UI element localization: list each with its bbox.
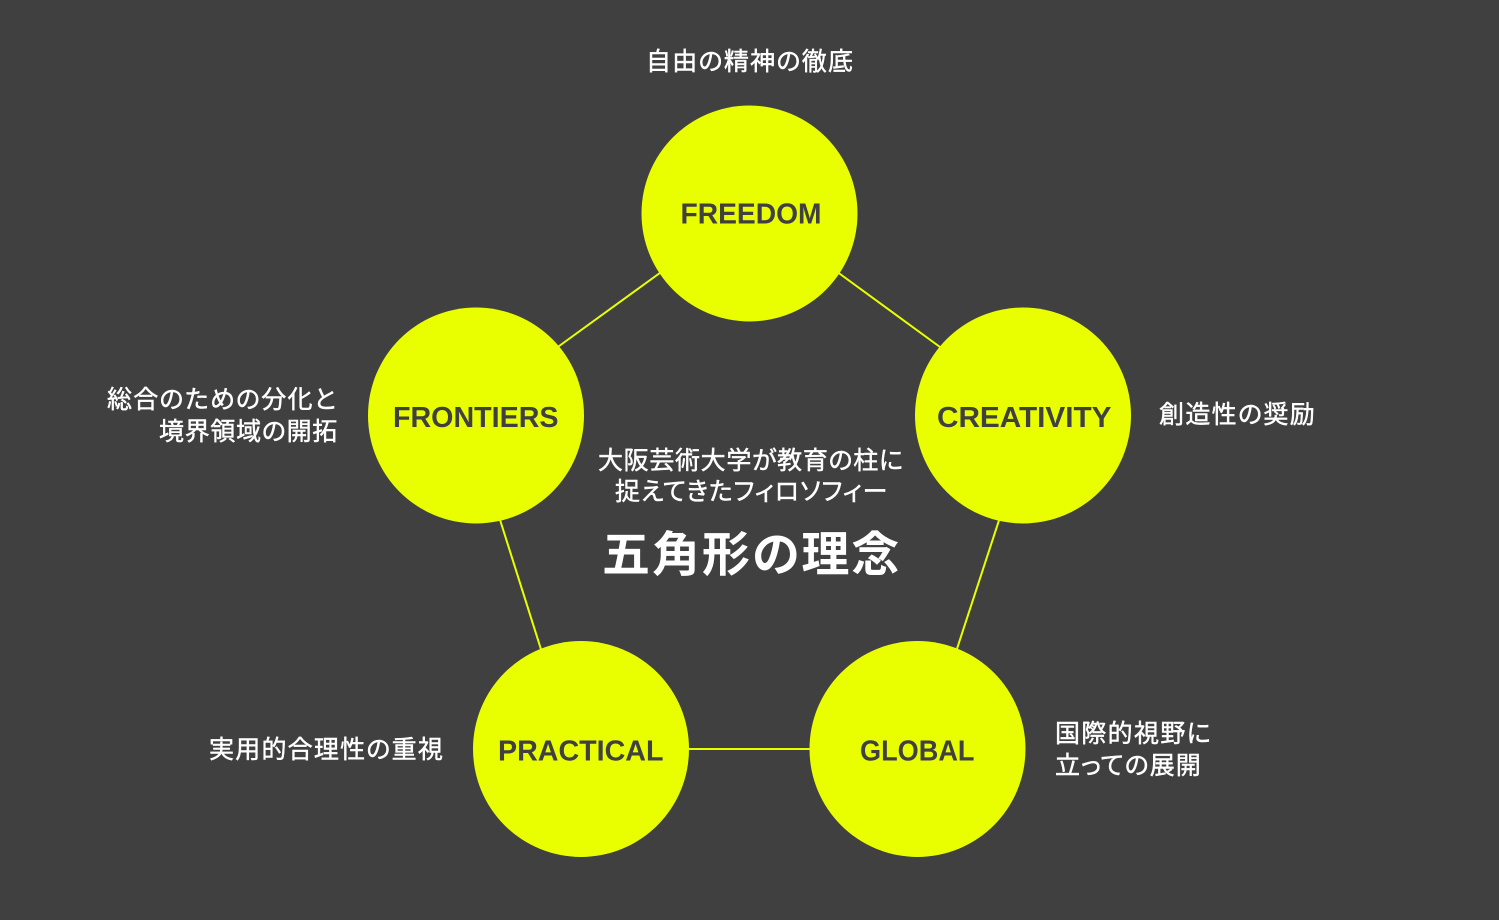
label: frontiers: 境界領域の開拓	[159, 412, 338, 448]
label: frontiers	[107, 380, 338, 448]
circle: FRONTIERS	[368, 308, 584, 524]
circle: CREATIVITY	[915, 308, 1131, 524]
circle: FREEDOM: FREEDOM	[680, 198, 822, 230]
circle: GLOBAL	[810, 641, 1026, 857]
center subheading	[598, 441, 904, 508]
circle: PRACTICAL	[473, 641, 689, 857]
label: freedom: 自由の精神の徹底	[646, 42, 854, 78]
center subheading: 大阪芸術大学が教育の柱に	[598, 441, 904, 477]
circle: PRACTICAL: PRACTICAL	[498, 736, 664, 768]
center title: 五角形の理念	[602, 515, 901, 585]
label: global: 立っての展開	[1055, 746, 1202, 782]
circle: FRONTIERS: FRONTIERS	[393, 402, 558, 434]
label: frontiers: 総合のための分化と	[107, 380, 337, 416]
circle: CREATIVITY: CREATIVITY	[937, 402, 1112, 434]
label: global: 国際的視野に	[1055, 714, 1212, 750]
circle: GLOBAL: GLOBAL	[860, 736, 974, 768]
label: global	[1055, 714, 1212, 782]
label: practical: 実用的合理性の重視	[209, 730, 444, 766]
label: creativity: 創造性の奨励	[1159, 395, 1316, 431]
circle: FREEDOM	[642, 106, 858, 322]
pentagon connecting lines	[495, 262, 1004, 749]
center subheading: 捉えてきたフィロソフィー	[615, 472, 888, 508]
